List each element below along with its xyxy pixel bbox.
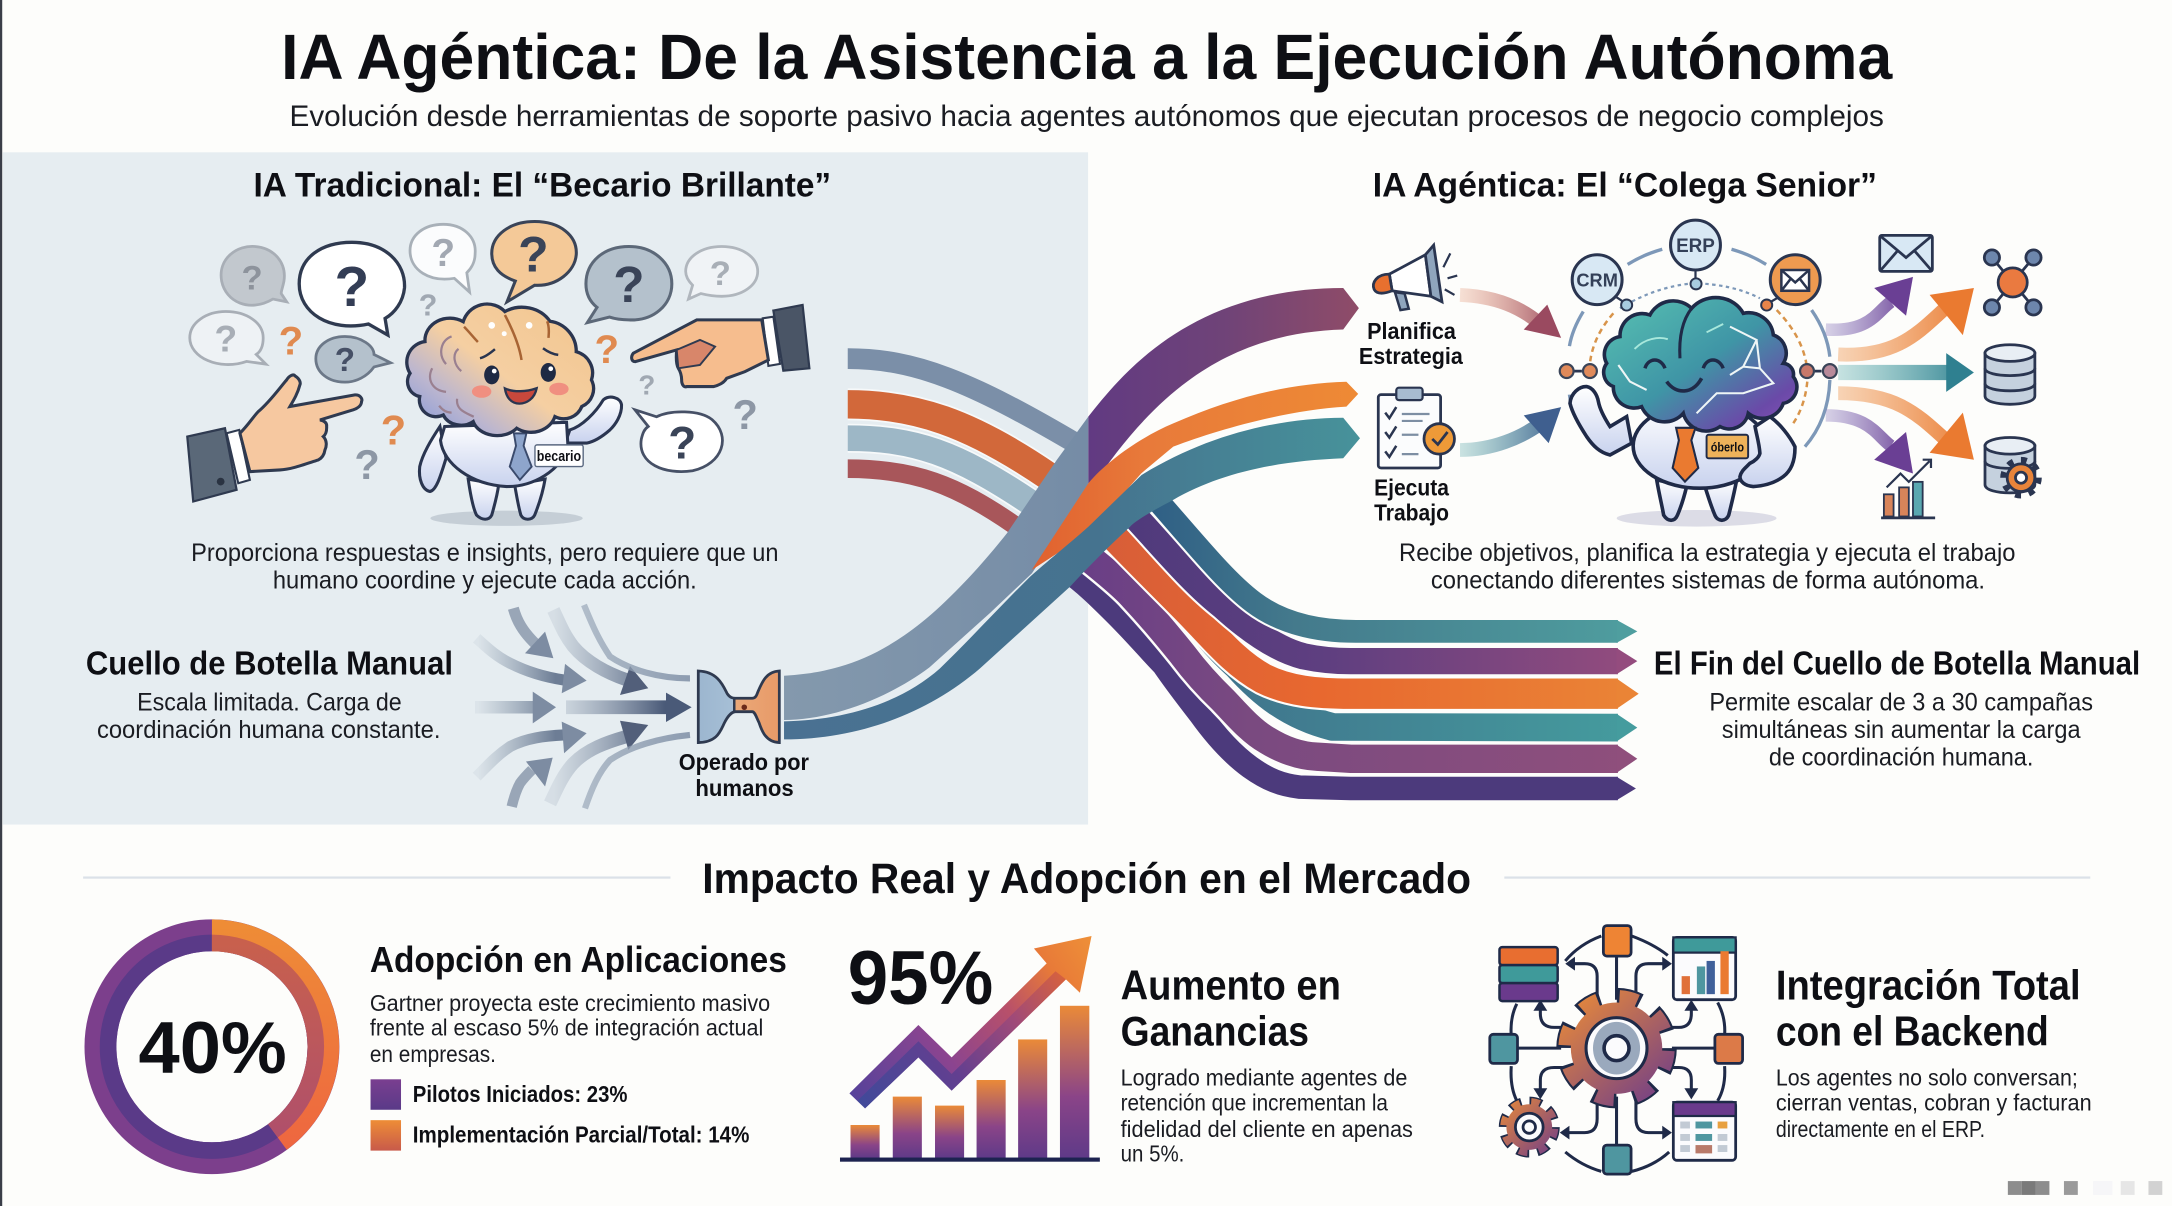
arrow: strategy to brain bbox=[1460, 295, 1561, 338]
speech bubbles and question marks: ? bbox=[518, 226, 549, 282]
icon: right pointing hand bbox=[632, 305, 809, 387]
icon: network bbox=[1984, 250, 2041, 315]
text: profit description: Logrado mediante agentes de bbox=[1121, 1065, 1407, 1091]
label: operated by humans: Operado por bbox=[679, 749, 809, 775]
icon: left pointing hand bbox=[187, 375, 362, 502]
description: agentic AI bbox=[1399, 539, 2015, 594]
text: adoption description: frente al escaso 5% de integración actual bbox=[370, 1015, 763, 1041]
heading: adoption: Adopción en Aplicaciones bbox=[370, 939, 787, 980]
heading: manual bottleneck: Cuello de Botella Manual bbox=[86, 645, 453, 682]
speech bubbles and question marks: ? bbox=[214, 318, 237, 360]
description: traditional AI bbox=[191, 539, 778, 594]
speech bubbles and question marks bbox=[190, 222, 758, 488]
speech bubbles and question marks: ? bbox=[381, 406, 406, 453]
arrows converging into bottleneck bbox=[475, 605, 692, 808]
heading: profit increase: Aumento en bbox=[1121, 962, 1341, 1009]
character: agentic brain: óberlo bbox=[1711, 440, 1744, 454]
heading: traditional AI: IA Tradicional: El “Becario Brillante” bbox=[253, 167, 831, 205]
text: end of bottleneck description: de coordinación humana. bbox=[1769, 744, 2033, 772]
speech bubbles and question marks: ? bbox=[354, 441, 380, 488]
icon: database bbox=[1985, 345, 2035, 404]
text: manual bottleneck description bbox=[97, 688, 440, 744]
text: integration description: Los agentes no solo conversan; bbox=[1776, 1065, 2078, 1091]
label: executes work: Ejecuta bbox=[1374, 475, 1450, 501]
speech bubbles and question marks: ? bbox=[242, 259, 263, 297]
arrows: outputs to systems bbox=[1826, 277, 1974, 474]
arrow: work to brain bbox=[1460, 407, 1561, 450]
legend: implementation bbox=[371, 1120, 749, 1151]
speech bubbles and question marks: ? bbox=[710, 255, 731, 293]
text: end of bottleneck description: Permite escalar de 3 a 30 campañas bbox=[1709, 688, 2093, 716]
text: profit description bbox=[1121, 1065, 1413, 1167]
description: traditional AI: humano coordine y ejecute cada acción. bbox=[273, 566, 697, 594]
speech bubbles and question marks: ? bbox=[279, 318, 303, 363]
text: integration description bbox=[1776, 1065, 2092, 1142]
subtitle: Evolución desde herramientas de soporte pasivo hacia agentes autónomos que ejecutan procesos de negocio complejos bbox=[290, 100, 1884, 133]
icon: megaphone bbox=[1373, 245, 1457, 310]
icon: clipboard checklist bbox=[1378, 388, 1454, 468]
legend: pilots bbox=[371, 1079, 627, 1110]
speech bubbles and question marks: ? bbox=[733, 391, 758, 438]
ribbon: gray strand from bottleneck bbox=[784, 417, 1088, 720]
character: becario brain bbox=[407, 304, 622, 526]
orbit connections and system nodes bbox=[1560, 220, 1837, 447]
heading: backend integration: Integración Total bbox=[1776, 962, 2081, 1009]
ribbons: four strands entering from the left bbox=[848, 359, 1078, 525]
orbit connections and system nodes: CRM bbox=[1576, 271, 1618, 291]
description: agentic AI: Recibe objetivos, planifica la estrategia y ejecuta el trabajo bbox=[1399, 539, 2015, 567]
speech bubbles and question marks: ? bbox=[638, 370, 655, 401]
character: agentic brain bbox=[1570, 298, 1797, 527]
text: adoption description: Gartner proyecta este crecimiento masivo bbox=[370, 990, 770, 1016]
text: profit description: retención que incrementan la bbox=[1121, 1089, 1388, 1115]
icon: envelope bbox=[1880, 235, 1932, 271]
text: integration description: cierran ventas, cobran y facturan bbox=[1776, 1089, 2092, 1115]
text: adoption description: en empresas. bbox=[370, 1041, 496, 1067]
text: profit description: un 5%. bbox=[1121, 1141, 1184, 1167]
orbit connections and system nodes: ERP bbox=[1676, 235, 1715, 257]
description: agentic AI: conectando diferentes sistemas de forma autónoma. bbox=[1431, 566, 1985, 594]
ribbon: teal strand to execution bbox=[784, 418, 1360, 739]
label: operated by humans bbox=[679, 749, 809, 801]
speech bubbles and question marks: ? bbox=[334, 256, 369, 319]
speech bubbles and question marks: ? bbox=[419, 289, 437, 323]
watermark blocks bbox=[2008, 1181, 2162, 1195]
speech bubbles and question marks: ? bbox=[594, 327, 619, 372]
heading: backend integration: con el Backend bbox=[1776, 1007, 2049, 1054]
speech bubbles and question marks: ? bbox=[431, 232, 455, 275]
heading: profit increase: Ganancias bbox=[1121, 1007, 1309, 1054]
legend: pilots: Pilotos Iniciados: 23% bbox=[413, 1081, 627, 1107]
label: plans strategy: Planifica bbox=[1367, 318, 1457, 344]
donut chart: 40%: 40% bbox=[139, 1007, 287, 1089]
description: traditional AI: Proporciona respuestas e insights, pero requiere que un bbox=[191, 539, 778, 567]
text: integration description: directamente en el ERP. bbox=[1776, 1116, 1985, 1142]
speech bubbles and question marks: ? bbox=[335, 342, 355, 379]
speech bubbles and question marks: ? bbox=[668, 417, 696, 468]
icon: database with gear bbox=[1985, 438, 2038, 494]
text: manual bottleneck description: coordinación humana constante. bbox=[97, 716, 440, 744]
ribbons: six strands leaving to the right bbox=[1067, 492, 1639, 800]
text: end of bottleneck description bbox=[1709, 688, 2093, 772]
left edge line bbox=[0, 0, 2, 1206]
text: adoption description bbox=[370, 990, 770, 1067]
label: executes work bbox=[1374, 475, 1450, 526]
growth chart bbox=[840, 936, 1100, 1162]
text: profit description: fidelidad del cliente en apenas bbox=[1121, 1116, 1413, 1142]
speech bubbles and question marks: ? bbox=[613, 256, 645, 313]
legend: implementation: Implementación Parcial/Total: 14% bbox=[413, 1121, 749, 1147]
section heading: market impact: Impacto Real y Adopción en el Mercado bbox=[702, 855, 1471, 903]
character: becario brain: becario bbox=[537, 449, 581, 465]
text: end of bottleneck description: simultáneas sin aumentar la carga bbox=[1722, 716, 2081, 744]
ribbon: purple strand to planning bbox=[1088, 288, 1359, 490]
heading: agentic AI: IA Agéntica: El “Colega Senior” bbox=[1373, 167, 1877, 205]
label: executes work: Trabajo bbox=[1374, 500, 1449, 526]
label: plans strategy: Estrategia bbox=[1359, 343, 1464, 369]
text: manual bottleneck description: Escala limitada. Carga de bbox=[137, 688, 402, 716]
donut chart: 40% bbox=[100, 919, 339, 1158]
panel: traditional AI background bbox=[3, 152, 1088, 825]
stat: 95%: 95% bbox=[848, 936, 993, 1021]
icon: small bar chart bbox=[1881, 460, 1935, 518]
heading: profit increase bbox=[1121, 962, 1341, 1054]
icon: bottleneck hourglass bbox=[698, 671, 779, 743]
label: operated by humans: humanos bbox=[695, 775, 794, 801]
ribbon: orange strand bbox=[1032, 382, 1358, 570]
icon: backend integration network bbox=[1490, 926, 1743, 1174]
heading: backend integration bbox=[1776, 962, 2081, 1054]
title: IA Agéntica: De la Asistencia a la Ejecución Autónoma bbox=[281, 22, 1893, 93]
label: plans strategy bbox=[1359, 318, 1464, 369]
